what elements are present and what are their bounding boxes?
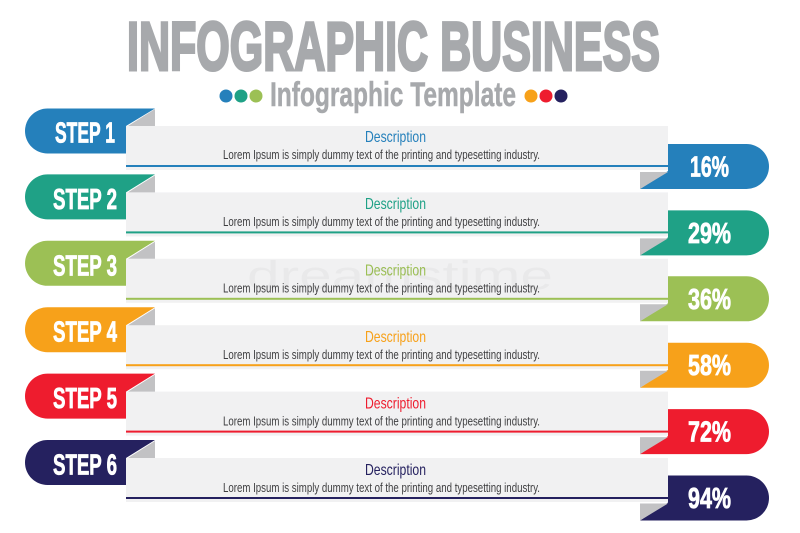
step tab [25,307,155,352]
description: Description [365,329,426,346]
description: Description [365,396,426,412]
accent line [126,497,668,499]
percent tab: 36% [688,284,731,316]
step 5 row [25,374,769,454]
panel [126,325,668,369]
percent tab [640,409,769,454]
panel [126,192,668,236]
description: Description [365,196,426,213]
step tab: STEP 4 [53,317,117,349]
accent line [126,298,668,300]
step tab [25,440,155,485]
step tab: STEP 6 [53,450,117,482]
accent line [126,431,668,433]
body text: Lorem Ipsum is simply dummy text of the printing and typesetting industry. [223,282,540,296]
accent line [126,364,668,366]
percent tab [640,144,769,189]
percent tab: 58% [688,350,731,382]
watermark: dreamstime [247,254,553,298]
step tab [25,241,155,286]
body text: Lorem Ipsum is simply dummy text of the printing and typesetting industry. [223,414,540,428]
step tab: STEP 1 [55,118,115,150]
percent tab [640,343,769,388]
description: Description [365,462,426,479]
step 6 row [25,440,769,520]
body text: Lorem Ipsum is simply dummy text of the printing and typesetting industry. [223,215,540,229]
percent tab [640,476,769,520]
body text: Lorem Ipsum is simply dummy text of the printing and typesetting industry. [223,481,540,495]
panel [126,126,668,170]
step tab [25,174,155,219]
percent tab: 94% [688,483,731,515]
left colored dots [220,90,262,102]
step 4 row [25,307,769,388]
percent tab [640,210,769,255]
step tab: STEP 5 [53,383,117,415]
description: Description [365,129,426,146]
panel [126,259,668,303]
percent tab: 72% [688,417,731,449]
body text: Lorem Ipsum is simply dummy text of the printing and typesetting industry. [223,348,540,362]
percent tab: 16% [690,152,729,184]
step tab [25,108,155,154]
panel [126,392,668,436]
accent line [126,231,668,233]
subtitle text: Infographic Template [270,76,516,114]
step tab: STEP 3 [53,250,117,282]
right colored dots [524,90,568,102]
step tab [25,374,155,419]
percent tab [640,276,769,321]
body text: Lorem Ipsum is simply dummy text of the printing and typesetting industry. [223,148,540,162]
panel [126,458,668,502]
step tab: STEP 2 [53,184,117,216]
step 2 row [25,174,769,255]
percent tab: 29% [688,218,731,250]
description: Description [365,262,426,280]
subtitle [220,76,568,114]
step 1 row [25,108,769,189]
step 3 row [25,241,769,321]
accent line [126,165,668,167]
